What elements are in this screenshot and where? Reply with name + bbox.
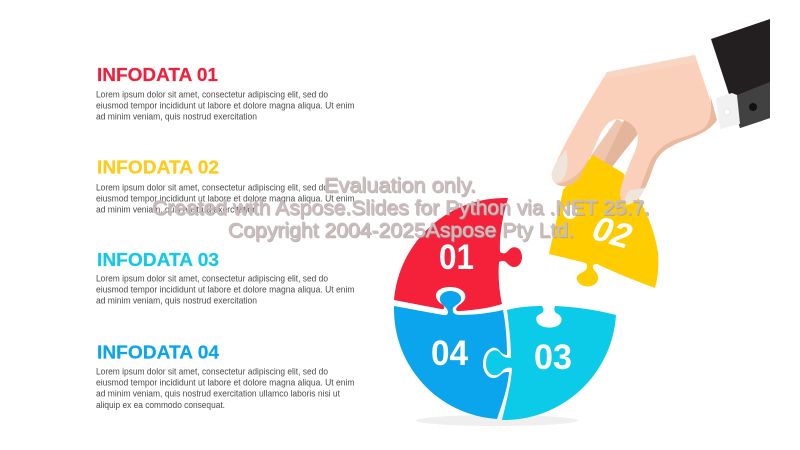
- puzzle shadow: [416, 415, 578, 426]
- heading: infodata 04: INFODATA 04: [97, 342, 220, 362]
- watermark: Evaluation only.: [325, 176, 477, 198]
- notch in piece 02: [563, 205, 577, 219]
- body text: infodata 01: Lorem ipsum dolor sit amet, consectetur adipiscing elit, sed do: [96, 90, 328, 100]
- body text: infodata 03: ad minim veniam, quis nostrud exercitation: [96, 296, 257, 306]
- puzzle piece 04: 04: [431, 334, 469, 373]
- hand: shadow along right side: [640, 94, 717, 189]
- puzzle piece 04: [394, 291, 509, 419]
- watermark: Copyright 2004-2025Aspose Pty Ltd.: [228, 220, 574, 242]
- hand: left fingertip nail: [552, 150, 568, 183]
- hand: main skin: [552, 55, 717, 203]
- hand: sleeve: [711, 19, 770, 128]
- body text: infodata 02: [96, 182, 354, 214]
- watermark: Evaluation only.: [324, 175, 476, 197]
- hand: shirt button: [724, 109, 730, 115]
- body text: infodata 04: aliquip ex ea commodo consequat.: [96, 400, 225, 410]
- body text: infodata 04: [96, 366, 354, 410]
- heading: infodata 02: INFODATA 02: [97, 156, 219, 178]
- body text: infodata 03: Lorem ipsum dolor sit amet, consectetur adipiscing elit, sed do: [96, 274, 328, 284]
- text block: infodata 04: [96, 342, 354, 410]
- puzzle piece 01: 01: [439, 238, 474, 277]
- body text: infodata 03: [96, 274, 354, 306]
- body text: infodata 03: eiusmod tempor incididunt ut labore et dolore magna aliqua. Ut enim: [96, 284, 354, 294]
- hand: sleeve fold: [737, 82, 770, 128]
- text block: infodata 02: [96, 156, 354, 214]
- watermark: Copyright 2004-2025Aspose Pty Ltd.: [229, 221, 575, 243]
- hand: back finger: [590, 118, 638, 167]
- puzzle piece 03: 03: [534, 338, 572, 377]
- hand: palm and fingers: [552, 55, 717, 205]
- hand reaching for the puzzle piece: [152, 19, 770, 243]
- text block: infodata 01: [96, 64, 354, 122]
- body text: infodata 02: Lorem ipsum dolor sit amet, consectetur adipiscing elit, sed do: [96, 182, 328, 192]
- body text: infodata 01: [96, 90, 354, 122]
- heading: infodata 03: INFODATA 03: [97, 249, 219, 270]
- body text: infodata 04: ad minim veniam, quis nostrud exercitation ullamco laboris nisi ut: [96, 388, 341, 398]
- body text: infodata 04: Lorem ipsum dolor sit amet, consectetur adipiscing elit, sed do: [96, 366, 328, 376]
- body text: infodata 01: ad minim veniam, quis nostrud exercitation: [96, 112, 257, 122]
- body text: infodata 02: eiusmod tempor incididunt ut labore et dolore magna aliqua. Ut enim: [96, 194, 354, 204]
- puzzle piece 02: 02: [585, 210, 639, 256]
- hand: shadow under left finger: [556, 157, 590, 186]
- body text: infodata 04: eiusmod tempor incididunt ut labore et dolore magna aliqua. Ut enim: [96, 378, 354, 388]
- heading: infodata 01: INFODATA 01: [97, 64, 218, 85]
- hand: shirt cuff: [716, 93, 740, 129]
- body text: infodata 02: ad minim veniam, quis nostrud exercitation: [96, 204, 257, 214]
- puzzle piece 03: [486, 306, 616, 420]
- hand: cufflink: [749, 103, 757, 111]
- hand: right fingertip nail: [625, 188, 645, 205]
- text block: infodata 03: [96, 249, 354, 306]
- puzzle piece 01: [394, 198, 522, 311]
- puzzle piece 02: [549, 155, 658, 288]
- body text: infodata 01: eiusmod tempor incididunt ut labore et dolore magna aliqua. Ut enim: [96, 100, 354, 110]
- watermark: Created with Aspose.Slides for Python via .NET 25.7.: [153, 198, 651, 220]
- watermark: Created with Aspose.Slides for Python via .NET 25.7.: [152, 198, 650, 220]
- watermark: [152, 175, 651, 243]
- hand: top strip: [603, 55, 697, 79]
